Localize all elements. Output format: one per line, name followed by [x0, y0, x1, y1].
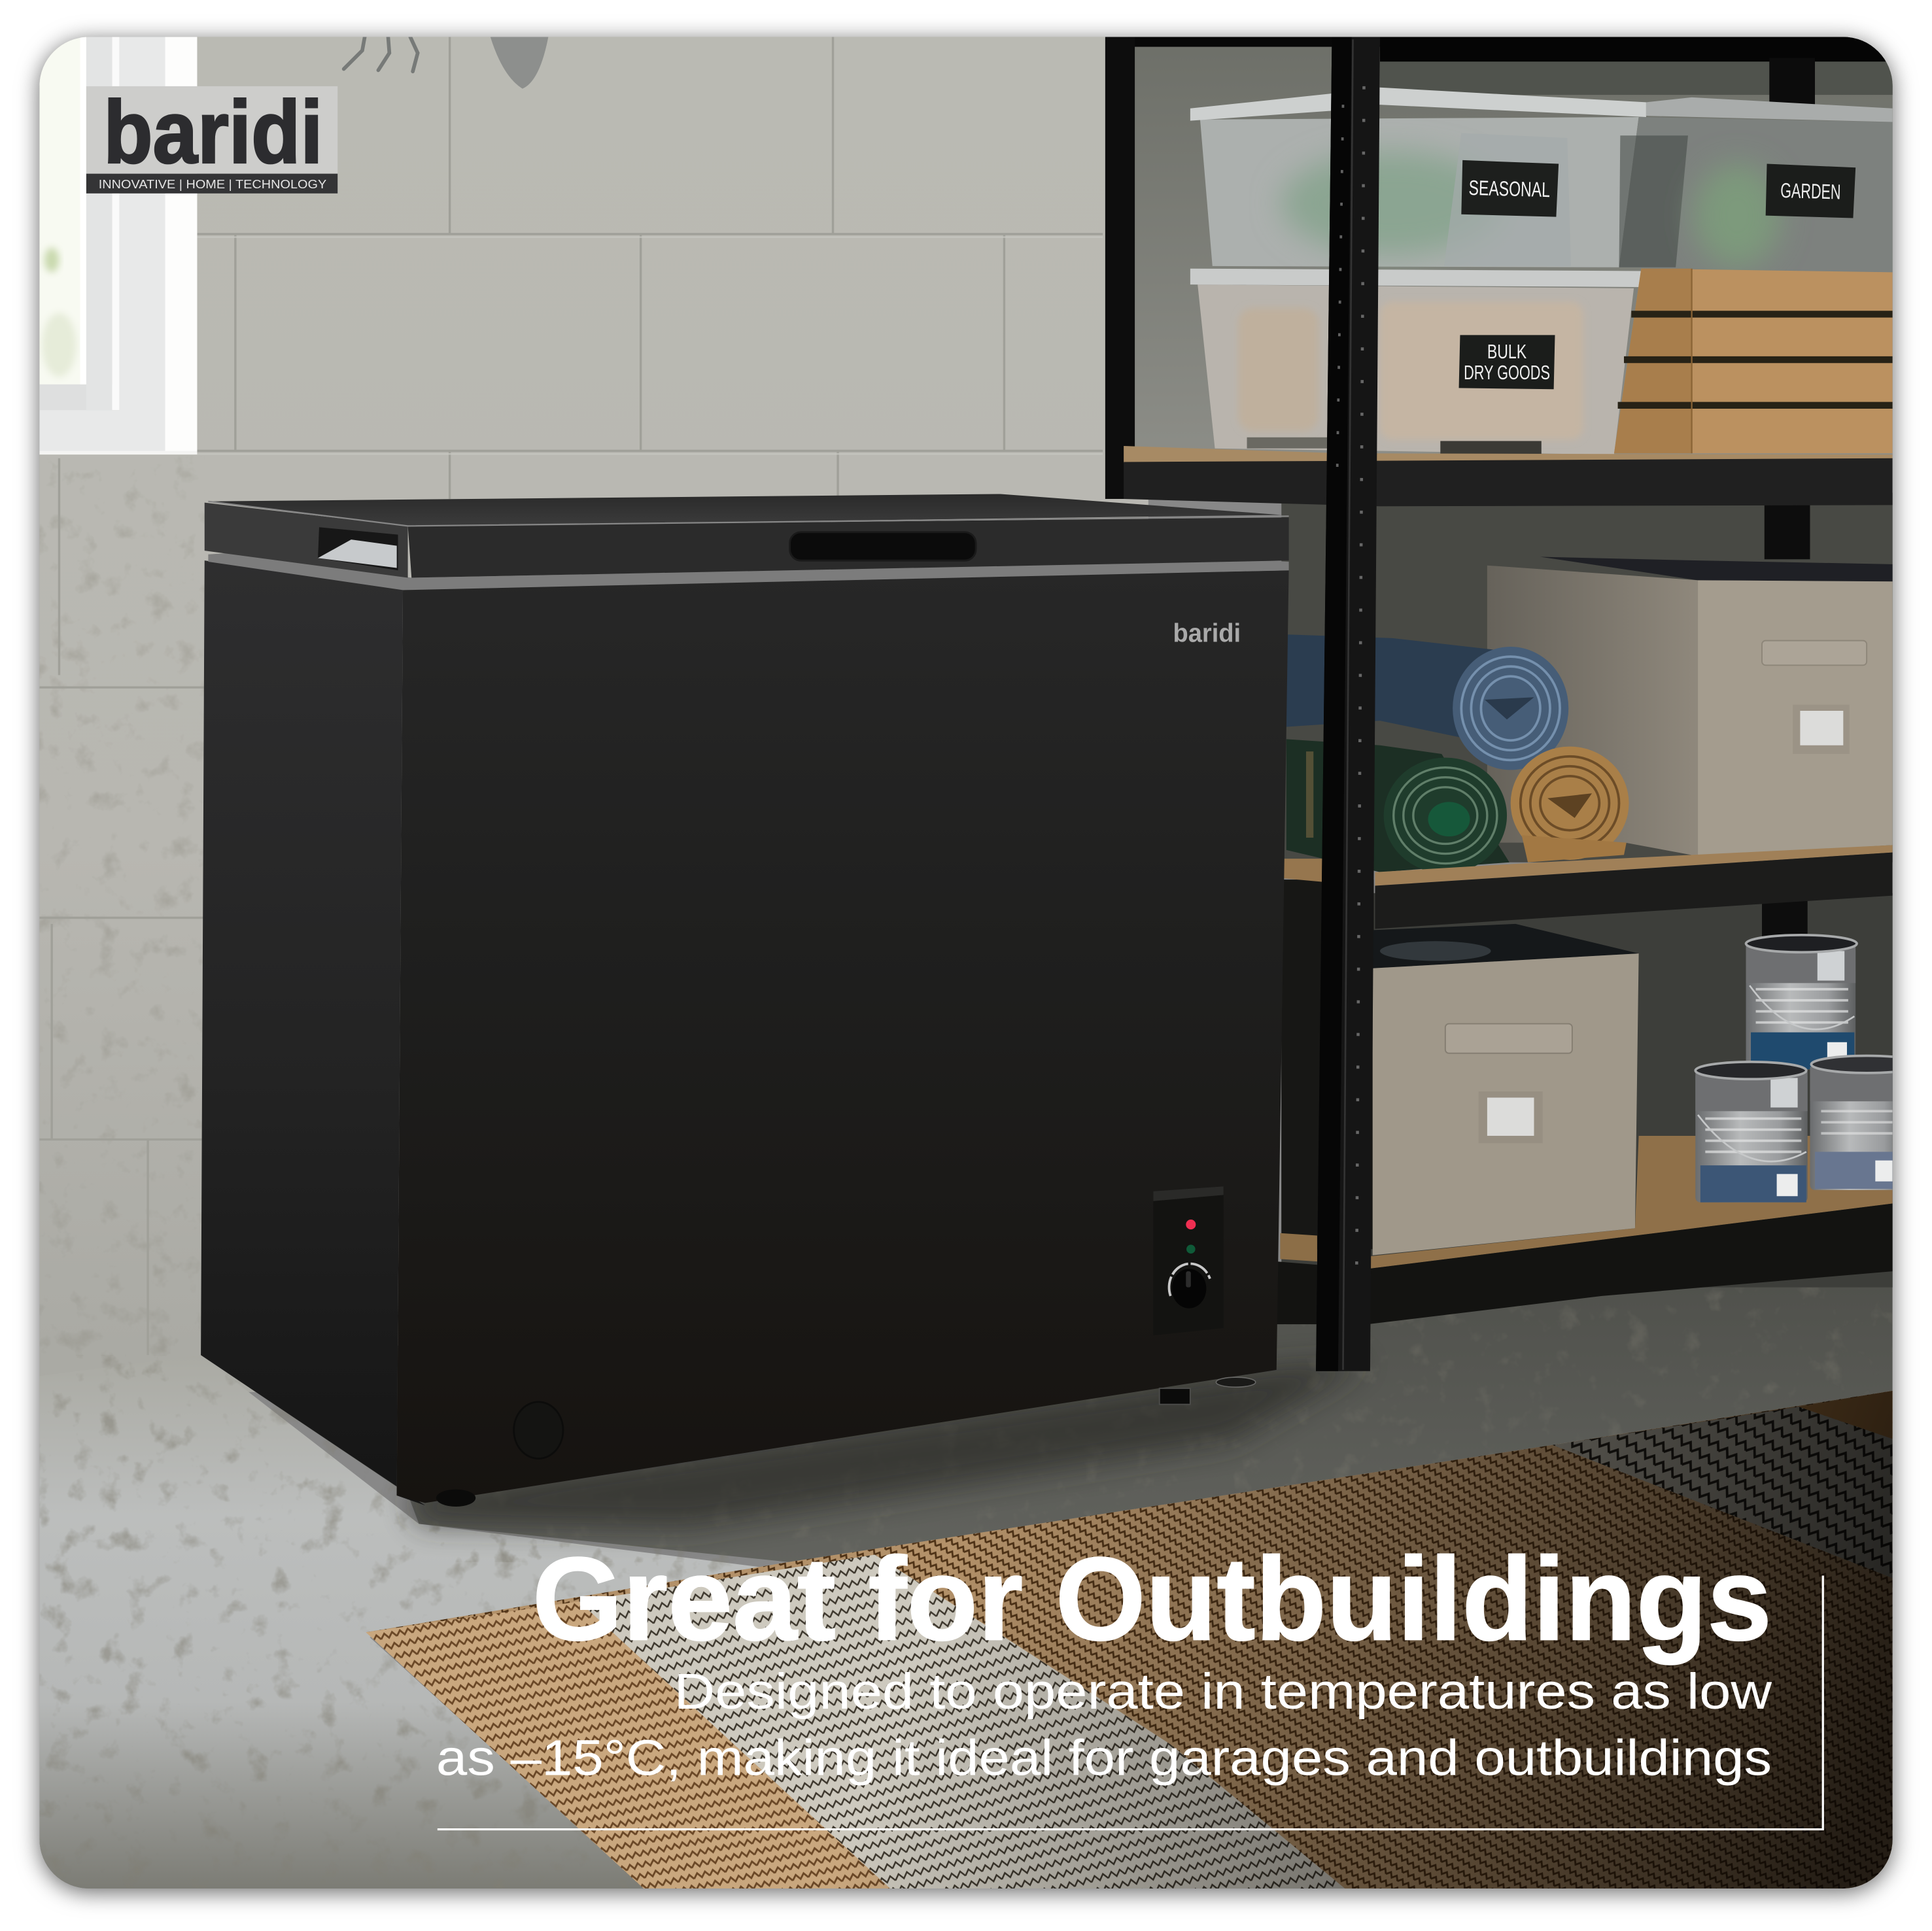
- storage bin: bulk dry goods: [1190, 269, 1644, 454]
- description text: [436, 1664, 1772, 1786]
- shelf 3: board: [1280, 1136, 1893, 1269]
- freezer left side: [201, 560, 425, 1505]
- rear foot circle: [514, 1402, 563, 1459]
- rolled tarp: green: [1286, 739, 1509, 874]
- description text: as –15°C, making it ideal for garages and outbuildings: [436, 1730, 1772, 1786]
- freezer brand mark: baridi: [1173, 619, 1241, 648]
- wooden crate: [1614, 269, 1893, 453]
- label: seasonal: SEASONAL: [1468, 176, 1550, 201]
- front foot: [436, 1490, 475, 1507]
- label: seasonal: [1461, 160, 1559, 217]
- label: linen box: [1800, 711, 1843, 745]
- lid hinge recess: [318, 527, 398, 570]
- floor: light concrete: [39, 1355, 789, 1888]
- paint can: lower left: [1695, 1062, 1808, 1203]
- title: Great for Outbuildings: [532, 1533, 1772, 1665]
- temperature control panel: [1153, 1186, 1224, 1335]
- label: garden: GARDEN: [1780, 179, 1841, 203]
- rolled tarp: tan: [1511, 747, 1629, 863]
- shelf 1: board and beam: [1124, 446, 1893, 506]
- logo wordmark: baridi: [103, 82, 323, 182]
- freezer lid side: [205, 503, 408, 578]
- window: [39, 37, 197, 454]
- main shelf upright: [1316, 37, 1380, 1371]
- chest freezer: [201, 494, 1289, 1507]
- floor: shaded concrete: [201, 1269, 1893, 1562]
- shelf 2: board and beam: [1284, 845, 1893, 929]
- plug and feet under freezer: [1160, 1377, 1256, 1405]
- paint can: top: [1746, 935, 1857, 1069]
- freezer lid front: [408, 517, 1289, 578]
- temperature dial: [1169, 1263, 1210, 1308]
- rolled tarp: blue: [1286, 634, 1568, 770]
- freezer silver seal strip: [208, 553, 1289, 590]
- wall hooks: [344, 37, 548, 89]
- label: garden: [1766, 164, 1855, 218]
- label: lower box: [1487, 1098, 1534, 1136]
- storage bin: seasonal: [1190, 88, 1646, 267]
- corner frame line: [438, 1575, 1823, 1830]
- storage box: upper linen box: [1487, 557, 1893, 856]
- red indicator light: [1186, 1220, 1196, 1229]
- description text: Designed to operate in temperatures as low: [674, 1664, 1772, 1720]
- logo tagline: INNOVATIVE | HOME | TECHNOLOGY: [99, 178, 326, 191]
- freezer front: [397, 570, 1289, 1503]
- paint can: lower right: [1810, 1055, 1922, 1190]
- freezer lid top: [208, 494, 1281, 526]
- lid handle: [790, 532, 976, 560]
- logo badge: [86, 82, 337, 194]
- shelf 3: beam: [1277, 1204, 1893, 1324]
- rug: [366, 1391, 1893, 1897]
- shelving: rear wall and top beam: [1105, 37, 1916, 1288]
- storage bin: garden: [1619, 97, 1893, 272]
- wall: cinder blocks: [39, 37, 1148, 1392]
- label: bulk dry goods: BULK: [1487, 341, 1527, 363]
- green indicator light: [1186, 1244, 1196, 1254]
- label: bulk dry goods: [1459, 335, 1555, 389]
- label: bulk dry goods: DRY GOODS: [1464, 362, 1550, 384]
- storage box: lower linen box: [1373, 924, 1639, 1256]
